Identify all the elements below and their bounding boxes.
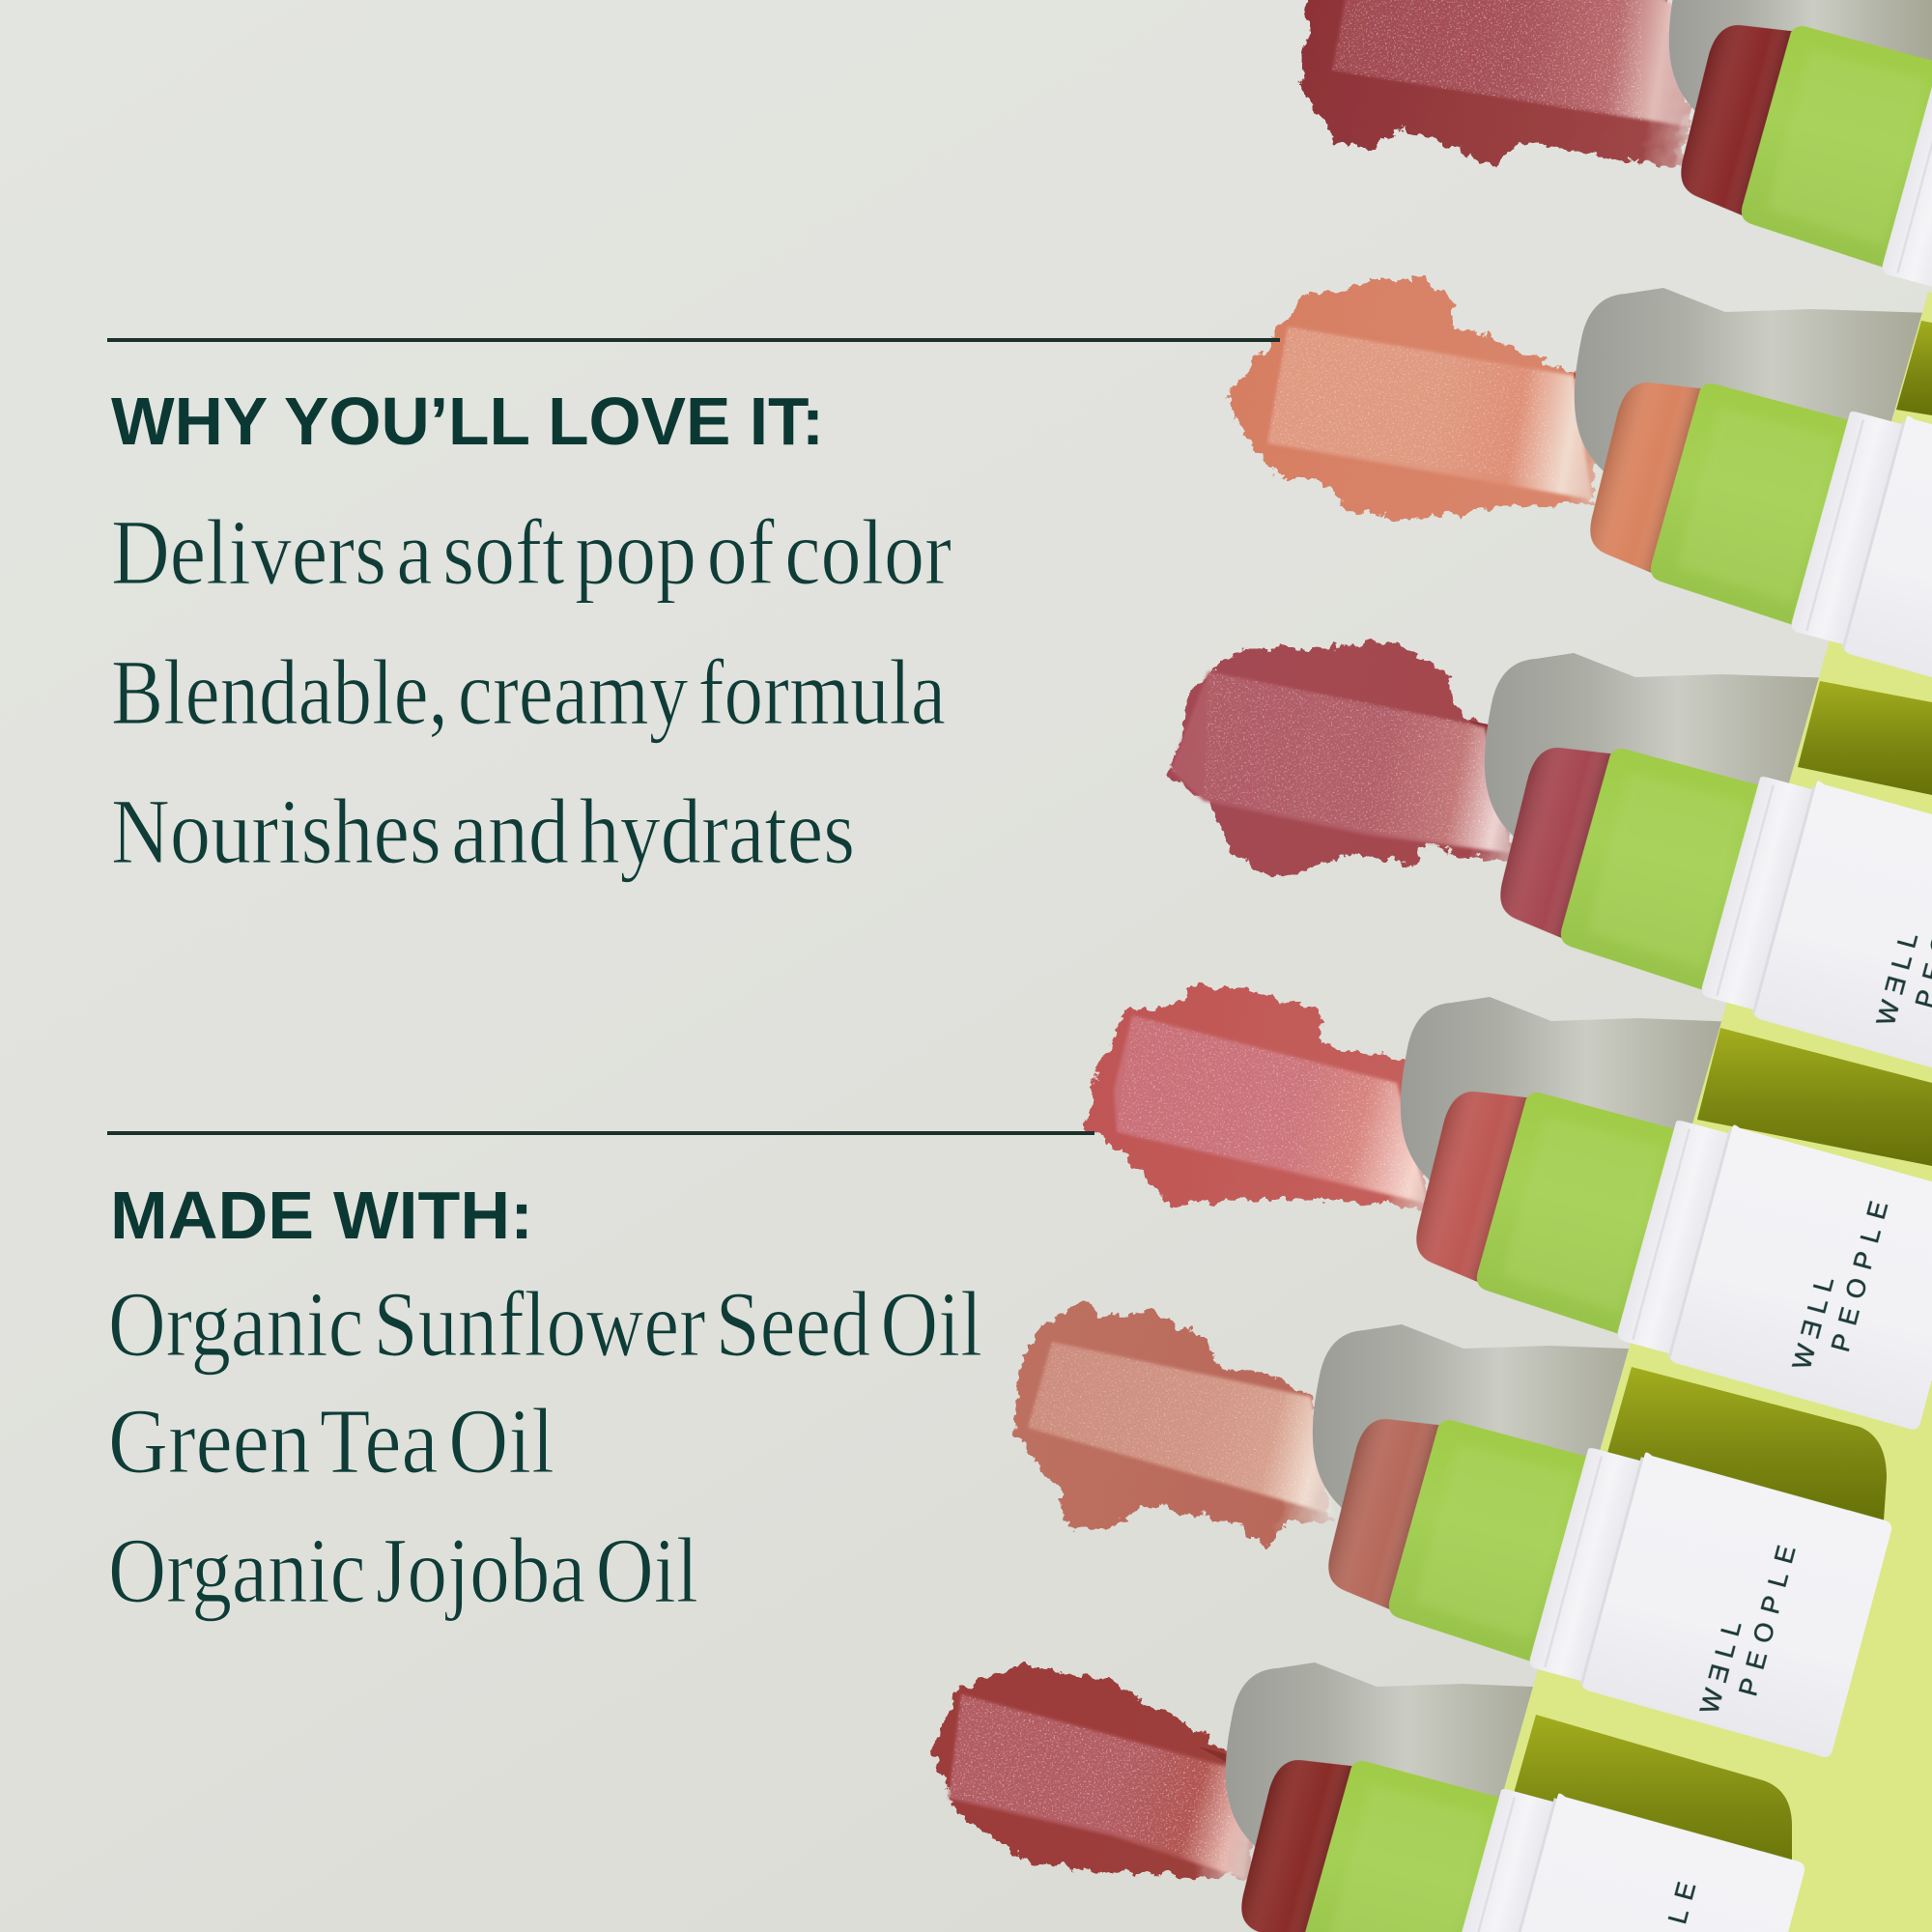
stick 3 xyxy=(1483,708,1932,1088)
stick 3: WƎLL xyxy=(1871,929,1923,1029)
ingredients list: Green Tea Oil xyxy=(108,1389,554,1492)
stick 6 xyxy=(1224,1720,1807,1932)
smear 2 xyxy=(1226,280,1628,521)
ingredients list: Organic Sunflower Seed Oil xyxy=(108,1272,982,1376)
ingredients list: Organic Jojoba Oil xyxy=(108,1519,698,1622)
divider: made with xyxy=(107,1131,1094,1135)
stick 4: PEOPLE xyxy=(1826,1198,1893,1355)
benefits list xyxy=(111,500,952,883)
ingredients list xyxy=(108,1272,982,1622)
stick 2 xyxy=(1573,343,1932,723)
stick 1 xyxy=(1663,0,1932,365)
smear 5 xyxy=(1012,1302,1333,1548)
smear 6 xyxy=(933,1665,1257,1879)
yellow panel xyxy=(1463,292,1932,1932)
stick 5 xyxy=(1311,1379,1894,1759)
smear 1 xyxy=(1302,0,1701,169)
benefits list: Delivers a soft pop of color xyxy=(111,500,952,604)
benefits list: Nourishes and hydrates xyxy=(111,780,855,883)
smear 3 xyxy=(1169,640,1536,878)
stick 5: PEOPLE xyxy=(1733,1543,1802,1699)
divider: why you'll love it xyxy=(107,338,1280,342)
heading: made with: MADE WITH: xyxy=(110,1178,533,1253)
stick 4: WƎLL xyxy=(1787,1273,1839,1373)
stick 5: WƎLL xyxy=(1694,1618,1747,1717)
benefits list: Blendable, creamy formula xyxy=(111,640,946,744)
product shadows on background xyxy=(1226,0,1932,1884)
heading: why you'll love it: WHY YOU’LL LOVE IT: xyxy=(111,384,824,459)
smear 4 xyxy=(1086,984,1446,1209)
stick 4 xyxy=(1399,1052,1932,1432)
panel shadows xyxy=(1513,321,1932,1879)
